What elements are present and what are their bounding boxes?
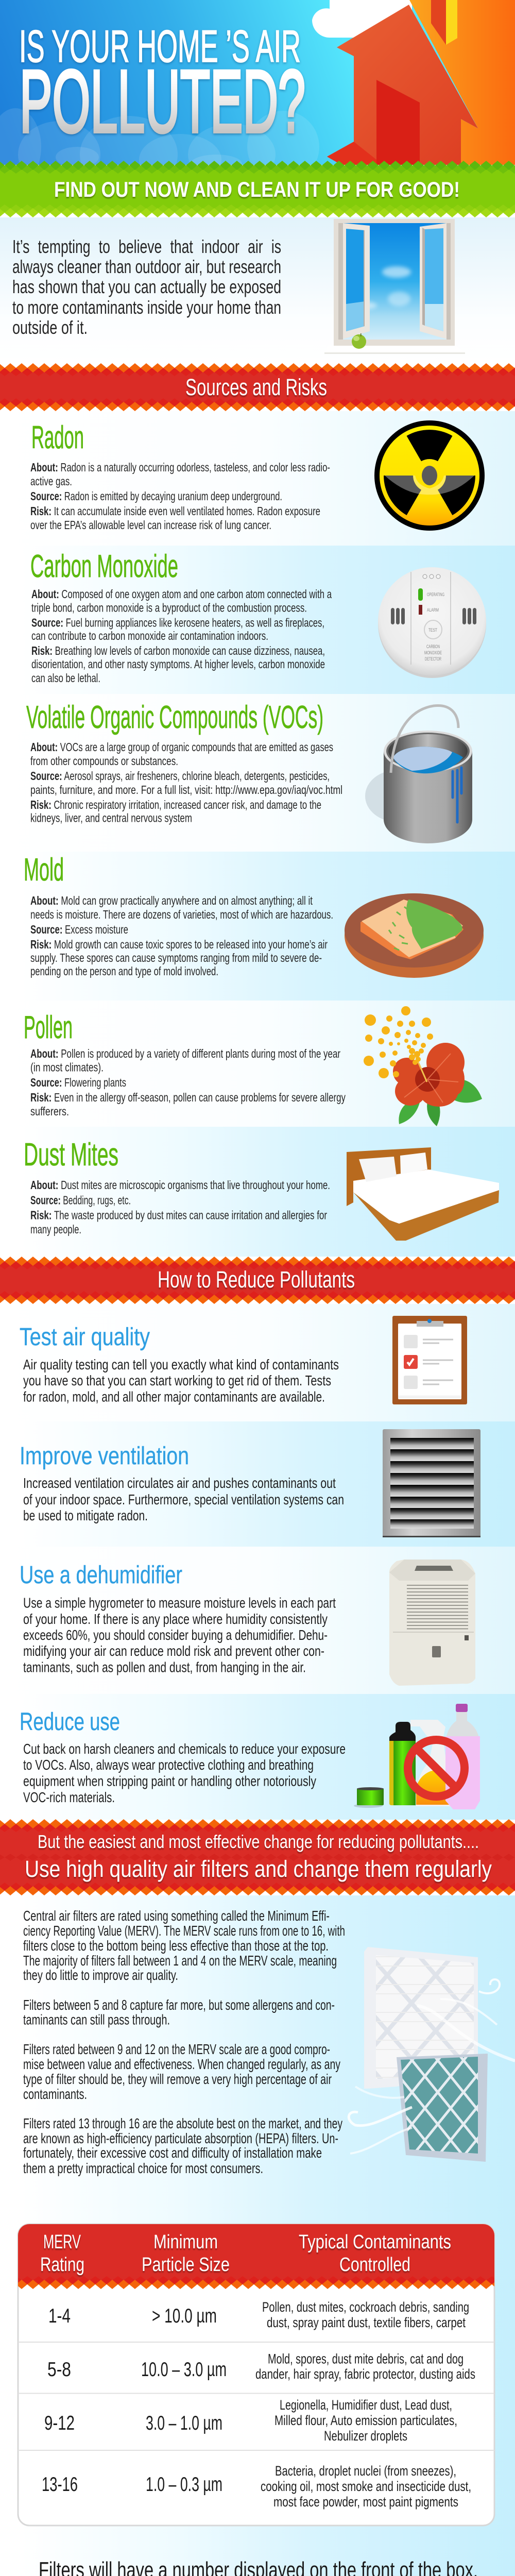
text: MERV explanation: The majority of filters fall between 1 and 4 on the MERV scale, meaning <box>23 1953 337 1969</box>
panel: improve ventilation <box>0 1421 515 1547</box>
text: MERV explanation: they do little to improve air quality. <box>23 1967 178 1983</box>
text: dust mite details: many people. <box>30 1223 81 1236</box>
text: carbon monoxide details: triple bond, carbon monoxide is a byproduct of the combustion process. <box>31 601 307 614</box>
text: carbon monoxide details: Risk: Breathing low levels of carbon monoxide can cause dizziness, nausea, <box>31 644 325 657</box>
text: of your indoor space. Furthermore, special ventilation systems can <box>23 1492 344 1507</box>
intro paragraph: always cleaner than outdoor air, but research <box>12 256 281 277</box>
section heading: How to Reduce Pollutants <box>158 1266 355 1293</box>
table row: MERV 5-8 <box>47 2351 475 2382</box>
panel: carbon monoxide <box>0 546 515 694</box>
text: for radon, mold, and all other major contaminants are available. <box>23 1389 325 1404</box>
text: midifying your air can reduce mold risk and prevent other con- <box>23 1643 324 1659</box>
intro panel <box>0 217 515 364</box>
text: radon details: About: Radon is a naturally occurring odorless, tasteless, and color less radio- <box>30 461 330 474</box>
text: mold details: About: Mold can grow practically anywhere and on almost anything; all it <box>30 894 313 907</box>
text: VOC details: Source: Aerosol sprays, air fresheners, chlorine bleach, detergents, pesticides, <box>30 769 330 783</box>
table header: MERV <box>43 2231 81 2253</box>
text: VOC details: Risk: Chronic respiratory irritation, increased cancer risk, and damage to the <box>30 798 321 811</box>
text: MERV explanation: ciency Reporting Value (MERV). The MERV scale runs from one to 16, with <box>23 1923 345 1939</box>
text: exceeds 60%, you should consider buying a dehumidifier. Dehu- <box>23 1627 328 1643</box>
text: MERV explanation: type of filter should be, they will remove a very high percentage of air <box>23 2071 332 2087</box>
text: MERV explanation: Filters rated 13 through 16 are the absolute best on the market, and they <box>23 2115 342 2131</box>
text: pollen details: About: Pollen is produced by a variety of different plants during most of the year <box>30 1047 340 1060</box>
text: dust mite details: Risk: The waste produced by dust mites can cause irritation and allergies for <box>30 1209 327 1222</box>
text: radon details: Risk: It can accumulate inside even well ventilated homes. Radon exposure <box>30 504 320 518</box>
header: sky with house and title <box>0 0 515 193</box>
text: radon details: active gas. <box>30 474 72 488</box>
heading: Carbon Monoxide: Carbon Monoxide <box>30 549 178 584</box>
background clouds <box>0 108 319 193</box>
icon: carbon monoxide detector: ALARM <box>427 607 439 613</box>
table header <box>0 2224 515 2289</box>
panel: mold <box>0 852 515 1001</box>
text: pollen details: Source: Flowering plants <box>30 1076 126 1089</box>
table header: Minimum <box>153 2231 218 2253</box>
text: mold details: needs is moisture. There are dozens of varieties, most of which are hazardous. <box>30 908 333 921</box>
icon: clipboard checklist <box>392 1316 467 1404</box>
icon: carbon monoxide detector: CARBON <box>426 644 440 649</box>
section heading: Sources and Risks <box>185 374 327 400</box>
house: orange side <box>409 0 515 165</box>
text: Cut back on harsh cleaners and chemicals to reduce your exposure <box>23 1741 346 1757</box>
intro paragraph: It’s tempting to believe that indoor air is <box>12 236 281 257</box>
table row: MERV 1-4 <box>48 2299 469 2330</box>
text: mold details: Source: Excess moisture <box>30 923 128 936</box>
icon: chemical bottles with prohibition sign <box>354 1704 480 1809</box>
text: MERV explanation: are known as high-efficiency particulate absorption (HEPA) filters. Un- <box>23 2130 338 2146</box>
table: MERV ratings <box>0 2224 515 2526</box>
text: mold details: pending on the person and type of mold involved. <box>30 964 218 978</box>
table row: MERV 1-4: 1-4 <box>48 2305 71 2327</box>
table row: MERV 13-16: 1.0 – 0.3 µm <box>146 2473 222 2496</box>
text: mold details <box>30 894 333 978</box>
text: MERV explanation: filters close to the bottom being less effective than those at the top. <box>23 1938 329 1954</box>
heading: Test air quality <box>20 1324 150 1351</box>
panel: test air quality <box>0 1304 515 1421</box>
icon: hibiscus flower with pollen <box>364 1006 482 1126</box>
text: pollen details: Risk: Even in the allergy off-season, pollen can cause problems for severe allergy <box>30 1091 346 1104</box>
text: Air quality testing can tell you exactly what kind of contaminants <box>23 1357 339 1372</box>
icon: air vent <box>383 1429 480 1537</box>
panel: reduce use <box>0 1694 515 1820</box>
table row: MERV 9-12: Milled flour, Auto emission particulates, <box>274 2413 457 2428</box>
text: Use a simple hygrometer to measure moisture levels in each part <box>23 1595 336 1611</box>
text: carbon monoxide details: disorientation, and other nasty symptoms. At higher levels, carbon monoxide <box>31 657 325 671</box>
text: MERV explanation <box>23 1908 345 2176</box>
text: dust mite details <box>30 1178 330 1236</box>
icon: carbon monoxide detector: MONOXIDE <box>424 650 442 655</box>
house: chimney <box>431 0 457 45</box>
text: radon details: over the EPA’s allowable level can increase risk of lung cancer. <box>30 518 271 532</box>
text: pollen details <box>30 1047 346 1118</box>
text: equipment when stripping paint or handling other notoriously <box>23 1773 316 1789</box>
table row: MERV 13-16: Bacteria, droplet nuclei (from sneezes), <box>275 2463 456 2479</box>
text: radon details <box>30 461 330 532</box>
intro paragraph <box>12 236 281 338</box>
table row: MERV 9-12: 9-12 <box>44 2412 75 2434</box>
icon: paint bucket <box>365 705 472 843</box>
text: of your home. If there is any place where humidity consistently <box>23 1611 328 1627</box>
table row: MERV 13-16: 13-16 <box>42 2473 78 2496</box>
text: carbon monoxide details: can contribute to carbon monoxide air contamination indoors. <box>31 629 268 642</box>
intro paragraph: outside of it. <box>12 317 88 338</box>
table row: MERV 5-8: 5-8 <box>47 2359 71 2381</box>
icon: open window with apple <box>324 219 465 354</box>
icon: radiation symbol <box>374 420 485 531</box>
text: pollen details: (in most climates). <box>30 1060 104 1074</box>
text: MERV explanation: taminants can still pass through. <box>23 2011 170 2028</box>
house: front wall <box>327 5 478 165</box>
panel: use a dehumidifier <box>0 1547 515 1694</box>
panel: volatile organic compounds <box>0 694 515 852</box>
table header: Particle Size <box>142 2254 230 2276</box>
red band: Sources and Risks <box>0 363 515 411</box>
text: MERV explanation: them a pretty impractical choice for most consumers. <box>23 2160 263 2176</box>
green band: subtitle <box>0 161 515 217</box>
red band: How to Reduce Pollutants <box>0 1257 515 1304</box>
table header: Controlled <box>339 2254 410 2276</box>
icon: bed <box>347 1147 499 1241</box>
text: MERV explanation: fortunately, their excessive cost and difficulty of installation make <box>23 2145 322 2161</box>
text: carbon monoxide details: About: Composed of one oxygen atom and one carbon atom connected with a <box>31 587 332 601</box>
intro paragraph: has shown that you can actually be exposed <box>12 276 281 297</box>
title line one: IS YOUR HOME ’S AIR <box>19 21 301 72</box>
text: VOC details: kidneys, liver, and central nervous system <box>30 811 192 824</box>
text <box>23 1595 336 1675</box>
text: to VOCs. Also, always wear protective clothing and breathing <box>23 1757 314 1773</box>
text: mold details: Risk: Mold growth can cause toxic spores to be released into your home’s air <box>30 938 328 951</box>
icon: dehumidifier <box>389 1560 475 1686</box>
text: you have so that you can start working to get rid of them. Tests <box>23 1372 331 1388</box>
text: VOC details: from other compounds or substances. <box>30 754 178 768</box>
icon: air filters with swirling air <box>349 1947 515 2162</box>
icon: carbon monoxide detector: OPERATING <box>427 592 444 597</box>
text <box>23 1357 339 1404</box>
text: VOC details: About: VOCs are a large group of organic compounds that are emitted as gases <box>30 740 333 754</box>
heading: Radon: Radon <box>31 420 84 455</box>
heading: Dust Mites: Dust Mites <box>24 1137 118 1173</box>
text: carbon monoxide details <box>31 587 332 685</box>
panel: radon <box>0 411 515 546</box>
panel: dust mites <box>0 1127 515 1257</box>
text: dust mite details: About: Dust mites are microscopic organisms that live throughout your home. <box>30 1178 330 1192</box>
text: MERV explanation: Filters between 5 and 8 capture far more, but some allergens and con- <box>23 1997 335 2013</box>
text: taminants, such as pollen and dust, from hanging in the air. <box>23 1659 306 1675</box>
text: dust mite details: Source: Bedding, rugs, etc. <box>30 1193 131 1207</box>
text: Increased ventilation circulates air and pushes contaminants out <box>23 1475 336 1491</box>
table header: Rating <box>40 2254 84 2276</box>
text: mold details: supply. These spores can cause symptoms ranging from mild to severe de- <box>30 951 322 964</box>
text: MERV explanation: Central air filters are rated using something called the Minimum Effi- <box>23 1908 330 1924</box>
text: carbon monoxide details: can also be lethal. <box>31 671 100 685</box>
text: be used to mitigate radon. <box>23 1507 148 1523</box>
house: doorway and porch <box>327 80 420 165</box>
table row: MERV 9-12: 3.0 – 1.0 µm <box>146 2412 222 2434</box>
table row: MERV 5-8: 10.0 – 3.0 µm <box>141 2359 227 2381</box>
table row: MERV 13-16: most face powder, most paint pigments <box>273 2494 458 2510</box>
icon: moldy bread on plate <box>345 893 484 978</box>
text <box>23 1741 346 1805</box>
text: pollen details: sufferers. <box>30 1105 69 1118</box>
text: VOC details <box>30 740 342 824</box>
table row: MERV 9-12: Nebulizer droplets <box>324 2428 407 2444</box>
red band: use high quality air filters <box>0 1819 515 1895</box>
heading: Pollen: Pollen <box>24 1010 73 1045</box>
text: VOC details: paints, furniture, and more. For a full list, visit: http://www.epa.gov/iaq/voc.html <box>30 783 342 796</box>
icon: carbon monoxide detector: TEST <box>428 628 437 633</box>
white cloud behind roof <box>312 0 412 38</box>
table header: Typical Contaminants <box>299 2231 451 2253</box>
intro paragraph: to more contaminants inside your home than <box>12 297 281 318</box>
table row: MERV 9-12: Legionella, Humidifier dust, Lead dust, <box>280 2397 452 2413</box>
table row: MERV 13-16 <box>42 2463 471 2510</box>
text: VOC-rich materials. <box>23 1789 115 1805</box>
panel: pollen <box>0 1001 515 1127</box>
text: MERV explanation: mise between value and effectiveness. When changed regularly, as any <box>23 2056 340 2072</box>
icon: carbon monoxide detector: DETECTOR <box>425 656 441 662</box>
heading: Use a dehumidifier <box>20 1562 182 1589</box>
heading: Reduce use <box>20 1708 120 1736</box>
table row: MERV 1-4: > 10.0 µm <box>152 2305 217 2327</box>
text: carbon monoxide details: Source: Fuel burning appliances like kerosene heaters, as well as fireplaces, <box>31 616 324 630</box>
text: MERV explanation: contaminants. <box>23 2086 87 2102</box>
table row: MERV 9-12 <box>44 2397 457 2444</box>
panel: filters, table and ratings <box>0 1895 515 2576</box>
heading: Mold: Mold <box>24 852 64 888</box>
text: radon details: Source: Radon is emitted by decaying uranium deep underground. <box>30 489 282 503</box>
text: MERV explanation: Filters rated between 9 and 12 on the MERV scale are a good compro- <box>23 2041 330 2057</box>
text <box>23 1475 344 1523</box>
icon: carbon monoxide detector <box>378 567 486 678</box>
heading: Improve ventilation <box>20 1443 189 1470</box>
